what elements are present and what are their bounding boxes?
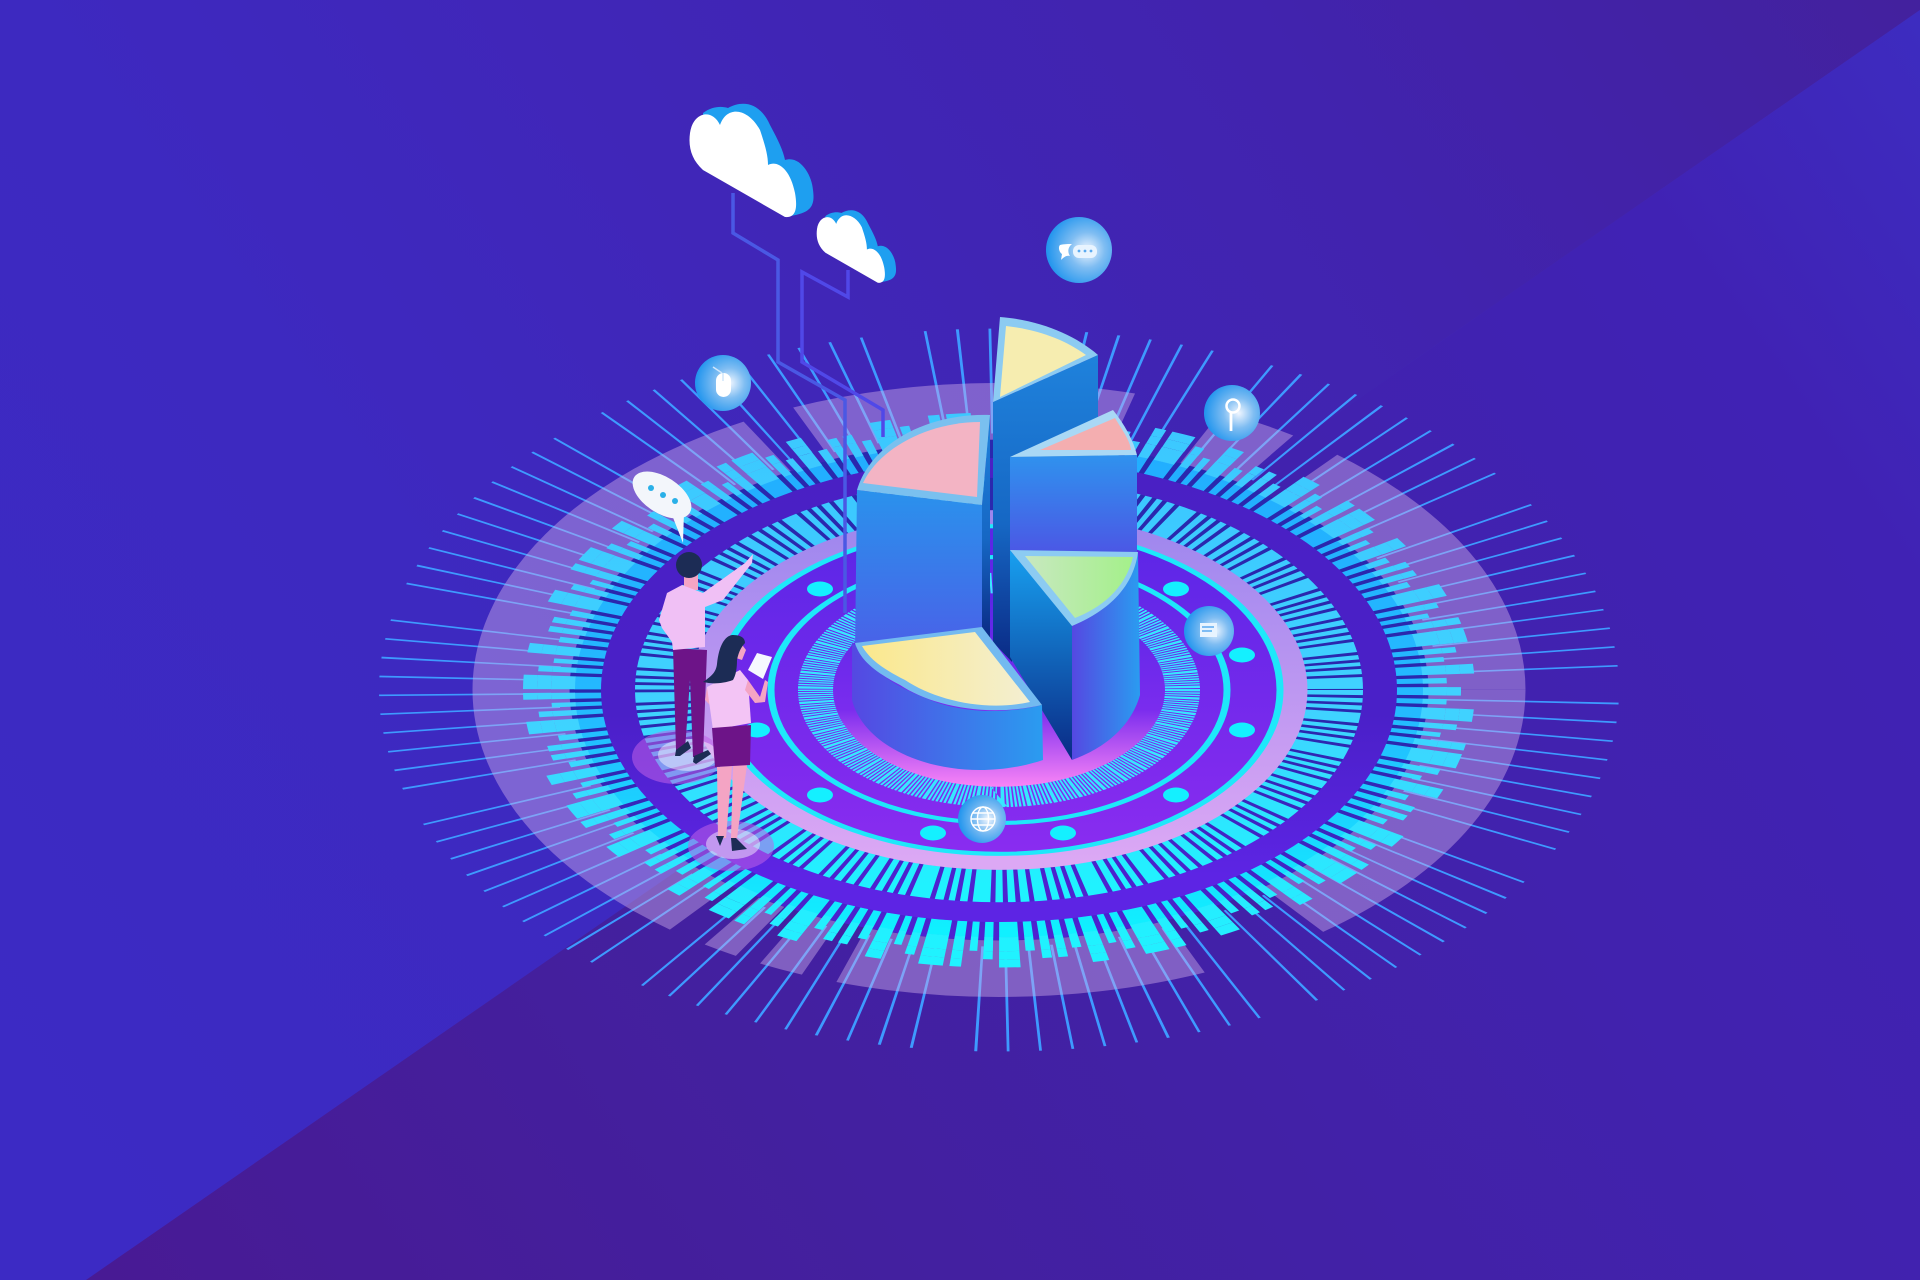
outer tick band, inner part <box>588 450 1410 930</box>
bright outer ring <box>718 526 1280 854</box>
bright inner ring <box>771 557 1227 823</box>
slice: green <box>1010 550 1140 760</box>
slice: salmon <box>1010 410 1137 552</box>
outer tick band, light part <box>563 436 1435 944</box>
platform: man <box>632 730 722 784</box>
violet inner disc <box>718 526 1280 854</box>
navy backing under outer ticks <box>586 449 1412 931</box>
icon: small cloud <box>817 210 896 283</box>
pink glowing base <box>833 593 1165 787</box>
person: man <box>659 552 753 764</box>
icon: large cloud <box>690 104 814 217</box>
pie chart <box>852 317 1140 770</box>
lavender ring <box>704 518 1294 862</box>
icon: magnifier <box>1204 385 1260 441</box>
inner dense tick band <box>816 583 1182 797</box>
slice: yellow <box>852 627 1043 770</box>
speech bubble <box>625 462 699 543</box>
icon: mouse <box>695 355 751 411</box>
translucent lavender outer band <box>521 411 1477 969</box>
circuit lines from clouds <box>733 193 883 613</box>
slice: pink <box>855 415 990 652</box>
radial data rings <box>469 381 1529 999</box>
icon: globe <box>958 795 1006 843</box>
violet disc <box>601 458 1397 922</box>
icon: document <box>1184 606 1234 656</box>
icon: chat bubbles <box>1046 217 1112 283</box>
backing under middle ticks <box>663 494 1335 886</box>
ring dots <box>744 582 1255 840</box>
spokes <box>469 381 1529 999</box>
platform: woman <box>688 821 774 871</box>
middle tick band <box>663 494 1335 886</box>
person: woman <box>703 635 772 851</box>
outer tick band, longest ticks <box>530 417 1468 963</box>
slice: tall pale yellow <box>993 317 1098 662</box>
outer tick band, long ticks <box>544 425 1454 955</box>
